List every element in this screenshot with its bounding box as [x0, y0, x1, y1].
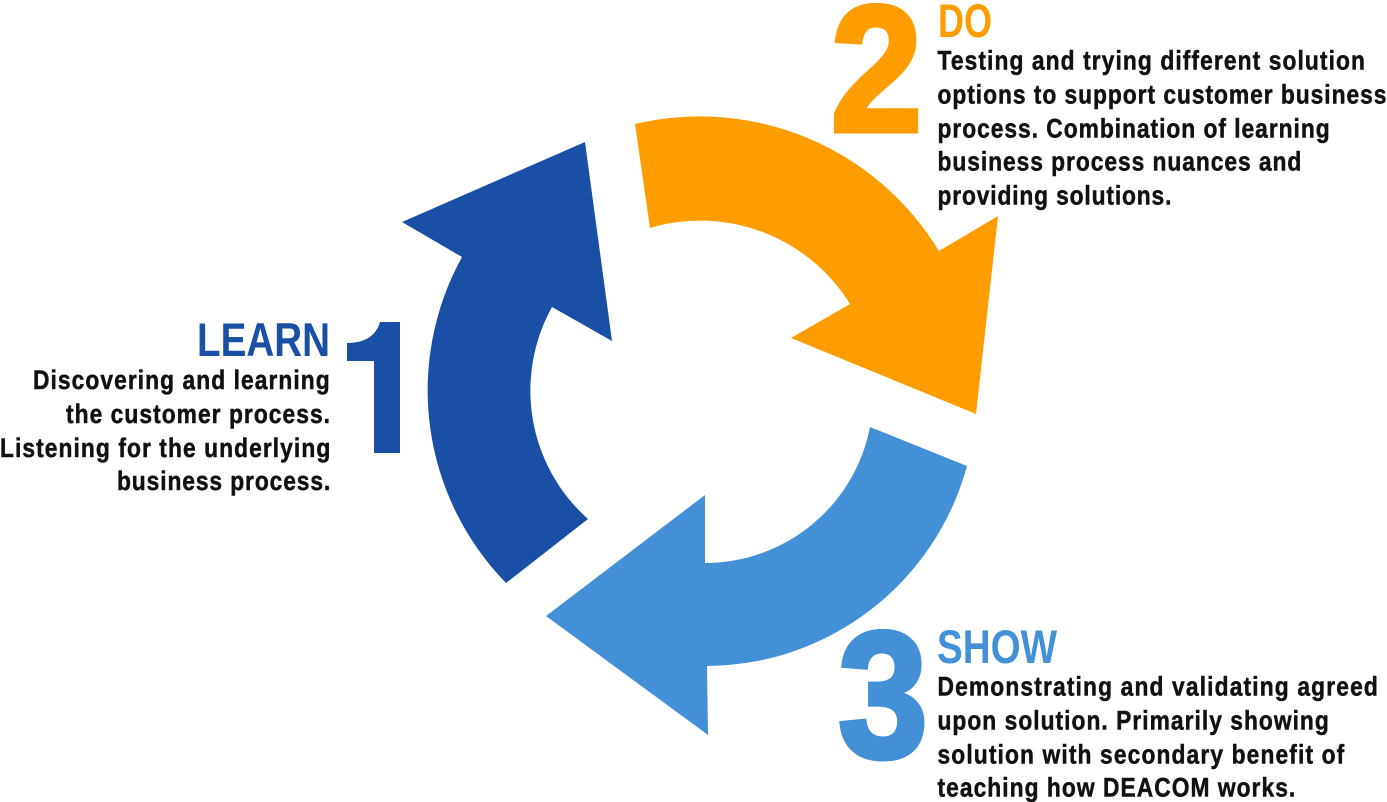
heading: show: SHOW — [937, 620, 1058, 673]
text: show description: solution with secondary benefit of — [938, 741, 1345, 770]
text: show description: upon solution. Primarily showing — [938, 707, 1329, 736]
arrow: do (orange) — [635, 116, 998, 414]
arrow: show (light blue) — [546, 427, 967, 735]
text: do description: process. Combination of learning — [938, 115, 1330, 144]
text: do description: providing solutions. — [938, 182, 1171, 211]
heading: learn: LEARN — [197, 313, 330, 366]
text: do description: business process nuances and — [938, 148, 1301, 177]
text: do description: options to support customer business — [938, 81, 1386, 110]
text: learn description: Listening for the underlying — [0, 434, 330, 463]
panel: do — [830, 0, 1386, 211]
text: learn description: Discovering and learning — [33, 366, 330, 395]
text: show description — [938, 673, 1378, 802]
panel: learn — [1, 322, 400, 496]
text: learn description: business process. — [117, 467, 330, 496]
arrow: learn (dark blue) — [402, 142, 612, 583]
panel: show — [838, 595, 1378, 802]
number 3: 3 — [838, 595, 928, 796]
number 1: 1 — [335, 291, 420, 492]
text: learn description: the customer process. — [66, 400, 330, 429]
text: do description — [938, 47, 1386, 211]
text: show description: Demonstrating and validating agreed — [938, 673, 1378, 702]
text: learn description — [0, 366, 330, 496]
text: do description: Testing and trying different solution — [938, 47, 1365, 76]
